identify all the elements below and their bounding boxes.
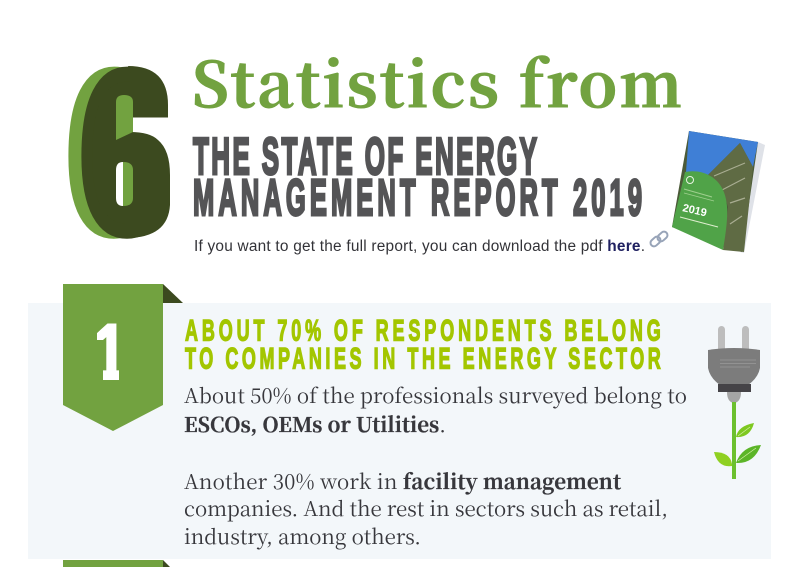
body text: statistic 1: ESCOs, OEMs or Utilities.	[184, 408, 446, 438]
icon: chain link	[649, 230, 669, 248]
body text: statistic 1	[184, 379, 687, 550]
ribbon: number 1	[63, 284, 183, 431]
big number six: 6	[68, 29, 156, 276]
panel: statistic 1	[28, 284, 771, 559]
body text: statistic 1: About 50% of the professionals surveyed belong to	[184, 379, 687, 409]
body text: statistic 1: industry, among others.	[184, 520, 421, 550]
heading: statistic 1: TO COMPANIES IN THE ENERGY SECTOR	[185, 343, 661, 376]
heading: statistic 1: ABOUT 70% OF RESPONDENTS BELONG	[185, 315, 661, 348]
subtitle: report name: MANAGEMENT REPORT 2019	[193, 169, 642, 226]
download note: If you want to get the full report, you can download the pdf here.	[194, 238, 645, 255]
subtitle: report name	[193, 127, 642, 226]
body text: statistic 1: Another 30% work in facility management	[184, 465, 621, 495]
body text: statistic 1: companies. And the rest in sectors such as retail,	[184, 492, 668, 522]
report book cover	[672, 131, 765, 253]
heading: statistic 1	[185, 315, 661, 376]
title: Statistics from: Statistics from	[192, 36, 682, 125]
report book cover: 2019	[681, 202, 708, 219]
icon: plug with sprout	[708, 326, 761, 479]
big number six: 6	[81, 29, 169, 276]
ribbon: number 1: 1	[94, 308, 126, 397]
subtitle: report name: THE STATE OF ENERGY	[193, 127, 537, 185]
ribbon: number 2 top	[63, 560, 170, 567]
